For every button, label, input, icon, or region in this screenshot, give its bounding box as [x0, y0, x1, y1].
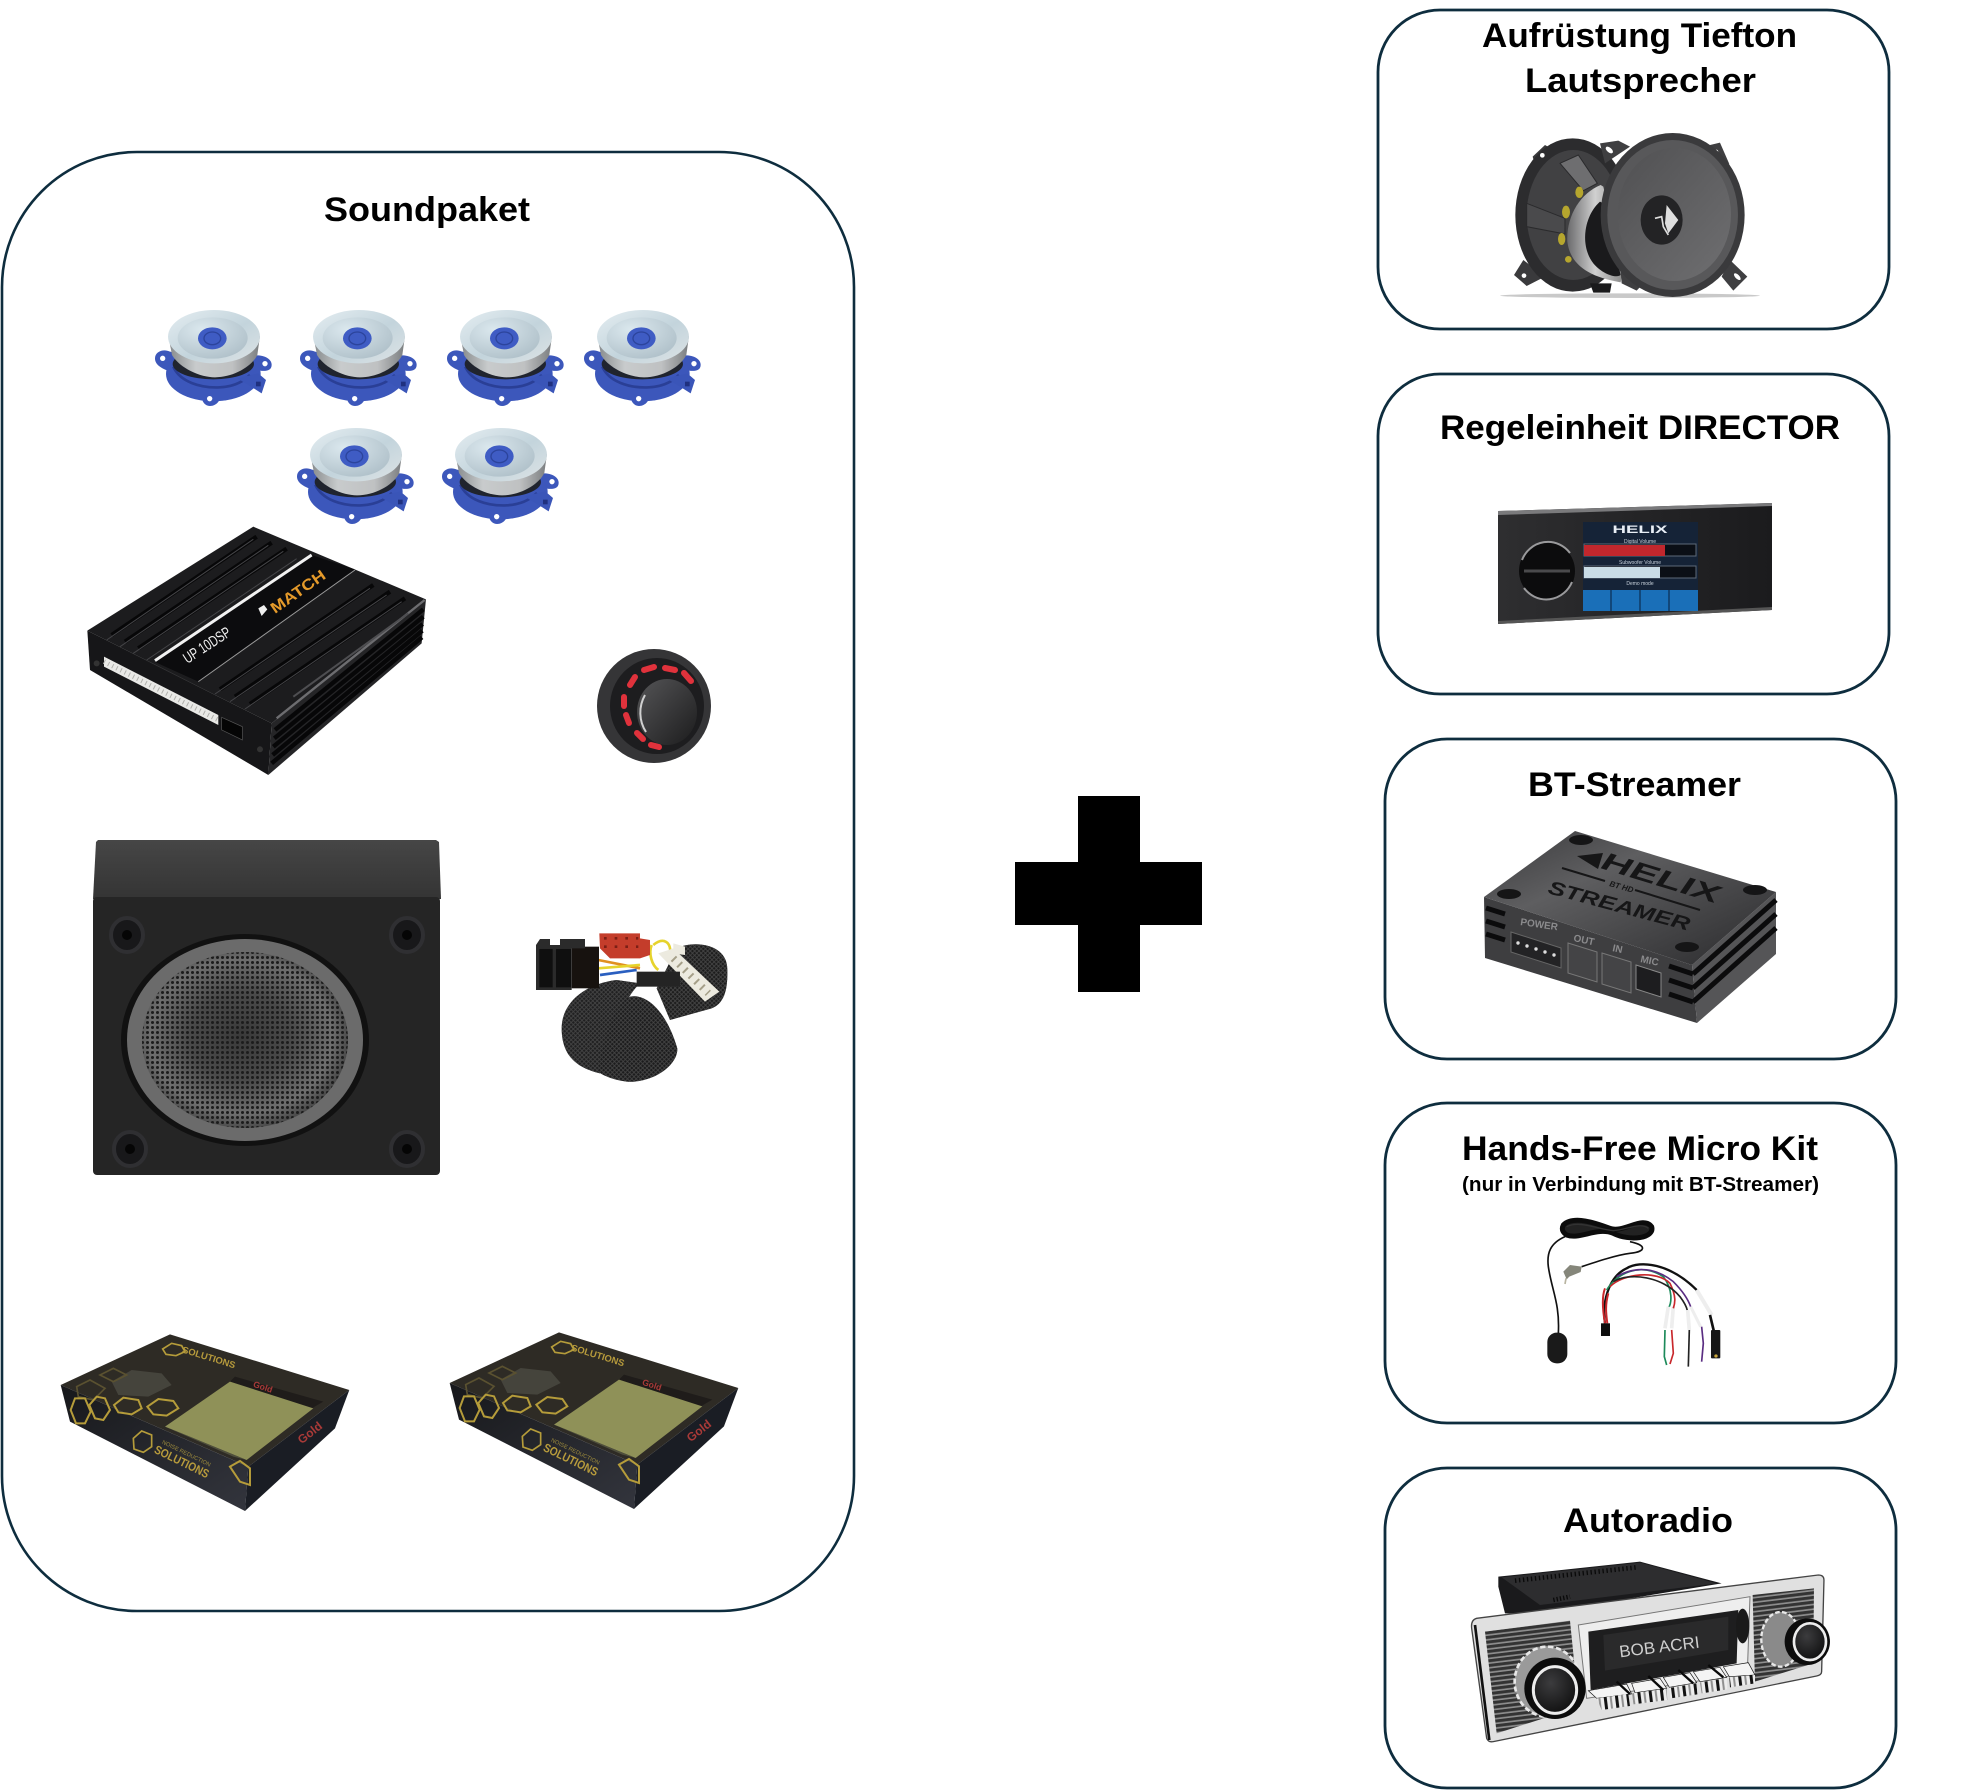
sound-deadening box 1: NOISE REDUCTION: [161, 1440, 211, 1468]
icon: haptic exciter 4: [584, 310, 701, 406]
icon: BT HD Streamer box: OUT: [1572, 933, 1595, 948]
touch screen: Subwoofer Volume: [1619, 560, 1661, 566]
upper right cable loop: [657, 944, 727, 1020]
icon: retro car radio: [1472, 1562, 1830, 1742]
heading: Aufrüstung Tiefton Lautsprecher: Aufrüstung Tiefton: [1482, 17, 1797, 55]
sound-deadening box 1: SOLUTIONS: [181, 1345, 237, 1370]
front speaker: [1600, 133, 1747, 297]
right knob: [1761, 1612, 1830, 1667]
amplifier UP 10DSP: MATCH: [268, 567, 329, 617]
small black connector: [637, 972, 680, 987]
plus sign: [1015, 796, 1202, 992]
wiring harness: [536, 933, 727, 1082]
icon: DIRECTOR control unit: [1498, 503, 1772, 624]
icon: haptic exciter 3: [447, 310, 564, 406]
heat-sink ribs: [107, 537, 425, 763]
white connector: [658, 943, 719, 1002]
display: BOB ACRI: [1618, 1633, 1701, 1661]
preset buttons: [1588, 1663, 1755, 1710]
icon: microphone with cable: [1547, 1220, 1652, 1363]
subwoofer mounting screws: [111, 918, 423, 1166]
icon: hands-free wire adapter: [1601, 1264, 1720, 1367]
sound-deadening box 1: [61, 1334, 349, 1511]
sound-deadening box 2: [450, 1332, 738, 1509]
rotary knob: [1519, 542, 1575, 600]
sound-deadening box 1: Gold: [252, 1379, 274, 1395]
black ISO connector: [536, 939, 599, 990]
white connector strip: [104, 657, 218, 725]
icon: BT HD Streamer box: HELIX: [1598, 847, 1725, 910]
icon: haptic exciter 6: [442, 428, 559, 524]
icon: BT HD Streamer box: STREAMER: [1546, 878, 1693, 936]
touch screen: HELIX: [1612, 524, 1669, 536]
subwoofer enclosure: [93, 840, 441, 1175]
heading: Autoradio: Autoradio: [1563, 1502, 1733, 1540]
heading: Hands-Free Micro Kit: Hands-Free Micro Kit: [1462, 1130, 1818, 1168]
subwoofer speaker grille: [121, 934, 369, 1146]
touch screen: [1583, 522, 1698, 611]
icon: BT HD Streamer box: POWER: [1520, 917, 1559, 933]
touch screen: Digital Volume: [1624, 539, 1656, 545]
sound-deadening box 2: Gold: [684, 1417, 714, 1445]
heading: Regeleinheit DIRECTOR: Regeleinheit DIRECTOR: [1440, 409, 1840, 447]
red ISO connector: [599, 933, 650, 958]
control knob with red LED ring: [597, 649, 711, 763]
amplifier UP 10DSP: UP 10DSP: [180, 624, 234, 667]
panel: BT-Streamer: [1385, 739, 1896, 1059]
icon: haptic exciter 1: [155, 310, 272, 406]
chassis: [1498, 1562, 1722, 1613]
panel: Hands-Free Micro Kit: [1385, 1103, 1896, 1423]
sound-deadening box 1: Gold: [295, 1419, 325, 1447]
display: [1578, 1597, 1750, 1698]
sound-deadening box 2: NOISE REDUCTION: [550, 1438, 600, 1466]
touch screen: Demo mode: [1626, 581, 1654, 587]
icon: haptic exciter 2: [300, 310, 417, 406]
left knob: [1515, 1647, 1586, 1719]
panel: Regeleinheit DIRECTOR: [1378, 374, 1889, 694]
panel: Autoradio: [1385, 1468, 1896, 1788]
sound-deadening box 2: Gold: [641, 1377, 663, 1393]
amplifier UP 10DSP: [87, 527, 426, 775]
icon: woofer speakers: [1500, 133, 1760, 298]
panel: Aufrüstung Tiefton Lautsprecher: [1378, 10, 1889, 329]
icon: BT HD Streamer box: MIC: [1639, 954, 1660, 969]
rear speaker basket: [1514, 138, 1630, 293]
subheading: BT-Streamer note: (nur in Verbindung mit BT-Streamer): [1462, 1174, 1819, 1196]
sound-deadening box 2: SOLUTIONS: [570, 1343, 626, 1368]
panel: Soundpaket: [2, 152, 854, 1611]
panel: Aufrüstung Tiefton Lautsprecher: Lautsprecher: [1525, 62, 1756, 100]
sound-deadening box 2: SOLUTIONS: [541, 1440, 600, 1479]
coloured wires: [598, 941, 670, 975]
icon: BT HD Streamer box: IN: [1611, 943, 1623, 956]
icon: BT HD Streamer box: [1484, 831, 1776, 1023]
chrome faceplate: [1472, 1575, 1824, 1742]
braided sleeve lobes: [562, 980, 677, 1082]
heading: BT-Streamer: BT-Streamer: [1528, 766, 1741, 804]
heading: Soundpaket: Soundpaket: [324, 191, 530, 229]
icon: BT HD Streamer box: BT HD: [1608, 879, 1635, 895]
red LED segments: [624, 667, 691, 747]
POWER terminal: [1511, 932, 1561, 968]
sound-deadening box 1: SOLUTIONS: [152, 1442, 211, 1481]
icon: haptic exciter 5: [297, 428, 414, 524]
